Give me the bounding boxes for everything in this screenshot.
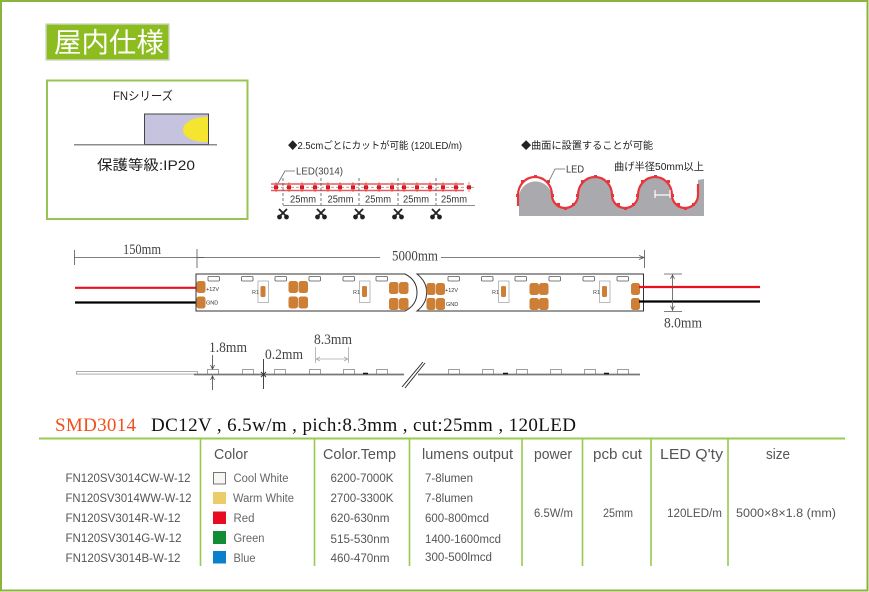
lumens output: 300-500lmcd <box>425 552 492 564</box>
table headers: Color.Temp <box>323 447 396 463</box>
cut lines <box>283 178 436 205</box>
table headers: pcb cut <box>593 447 642 463</box>
part numbers: FN120SV3014B-W-12 <box>66 553 180 565</box>
lumens output: 600-800mcd <box>425 513 489 525</box>
lumens output: 7-8lumen <box>425 493 473 505</box>
PCB base <box>194 374 640 376</box>
merged values: 6.5W/m <box>534 508 573 520</box>
color temperature: 2700-3300K <box>330 493 394 505</box>
color names: Cool White <box>234 473 288 485</box>
radius marker <box>655 190 670 198</box>
spec heading: SMD3014 <box>55 415 136 436</box>
curved surface <box>519 177 704 216</box>
radius label: 曲げ半径50mm以上 <box>614 160 704 173</box>
table headers: LED Q'ty <box>660 447 724 463</box>
color temperature: 620-630nm <box>330 513 390 525</box>
panel: curved installation <box>516 139 704 216</box>
dimension: 0.2mm: 0.2mm <box>265 347 303 363</box>
dimension: 1.8mm <box>209 340 247 390</box>
color names <box>233 473 294 565</box>
break mark <box>402 362 425 388</box>
length labels: 25mm <box>403 194 429 206</box>
table headers: Color <box>214 447 248 463</box>
dimension: 150mm: 150mm <box>123 242 161 258</box>
length labels <box>290 194 467 206</box>
color temperature <box>330 473 394 565</box>
dimension: 0.2mm <box>261 347 303 389</box>
color names: Green <box>234 533 264 545</box>
length labels: 25mm <box>290 194 316 206</box>
strip left section: GND <box>206 300 218 306</box>
panel: protection rating <box>47 80 248 219</box>
strip right section: +12V <box>445 288 458 294</box>
LED label: LED(3014) <box>296 166 343 178</box>
lumens output <box>425 473 501 564</box>
strip drawing <box>74 242 760 332</box>
icons: scissors <box>278 209 441 218</box>
strip right section: GND <box>446 302 458 308</box>
strip left section: R1 <box>252 290 259 296</box>
spec heading: DC12V , 6.5w/m , pich:8.3mm , cut:25mm , 120LED <box>151 415 576 436</box>
table headers <box>214 447 790 463</box>
title badge: 屋内仕様 <box>54 27 164 58</box>
part numbers: FN120SV3014WW-W-12 <box>66 493 192 505</box>
side view drawing <box>76 332 640 390</box>
LED label <box>548 164 584 183</box>
strip left section: R1 <box>353 290 360 296</box>
strip left section: +12V <box>206 287 219 293</box>
resistor marks <box>363 372 609 374</box>
heading: ◆曲面に設置することが可能 <box>521 139 653 152</box>
dimension: 5000mm: 5000mm <box>392 248 438 264</box>
series name: FNシリーズ <box>113 88 173 103</box>
wires right <box>639 287 760 302</box>
length labels: 25mm <box>441 194 467 206</box>
color temperature: 6200-7000K <box>330 473 394 485</box>
dimension: 5000mm <box>197 248 644 268</box>
LED strip on curve <box>516 175 698 210</box>
length labels: 25mm <box>365 194 391 206</box>
merged values: 5000×8×1.8 (mm) <box>736 508 836 520</box>
icon: strip cross-section <box>74 114 217 145</box>
dimension: 1.8mm: 1.8mm <box>209 340 247 356</box>
strip left section <box>196 274 417 311</box>
wire <box>76 372 198 374</box>
dimension: 150mm <box>74 242 204 268</box>
part numbers: FN120SV3014R-W-12 <box>66 513 180 525</box>
heading: ◆2.5cmごとにカットが可能 (120LED/m) <box>288 139 462 152</box>
length labels: 25mm <box>328 194 354 206</box>
lumens output: 1400-1600mcd <box>425 534 501 546</box>
dimension: 8.0mm <box>664 274 702 332</box>
side LEDs <box>208 370 628 374</box>
protection class text: 保護等級:IP20 <box>97 157 195 173</box>
dimension: 8.3mm: 8.3mm <box>314 332 352 348</box>
dimension: 8.0mm: 8.0mm <box>664 316 702 332</box>
color swatches <box>213 472 226 564</box>
merged values: 120LED/m <box>667 508 722 520</box>
LED label: LED <box>566 164 584 176</box>
strip right section: R1 <box>593 290 600 296</box>
part numbers: FN120SV3014G-W-12 <box>66 533 182 545</box>
LED strip <box>271 182 474 192</box>
merged values <box>534 508 836 520</box>
strip right section <box>417 274 644 311</box>
spec table <box>39 438 845 566</box>
color names: Red <box>234 513 254 525</box>
dimension: 8.3mm <box>314 332 352 363</box>
color temperature: 515-530nm <box>330 534 390 546</box>
wires left <box>75 288 196 302</box>
merged values: 25mm <box>603 508 633 520</box>
table headers: lumens output <box>422 447 513 463</box>
color temperature: 460-470nm <box>330 553 390 565</box>
strip right section: R1 <box>492 290 499 296</box>
table headers: size <box>766 447 790 463</box>
lumens output: 7-8lumen <box>425 473 473 485</box>
table headers: power <box>534 447 572 463</box>
part numbers: FN120SV3014CW-W-12 <box>66 473 190 485</box>
part numbers <box>66 473 192 565</box>
panel: cut every 2.5cm <box>271 139 475 218</box>
color names: Blue <box>234 553 256 565</box>
color names: Warm White <box>233 493 294 505</box>
LED label <box>277 166 343 185</box>
